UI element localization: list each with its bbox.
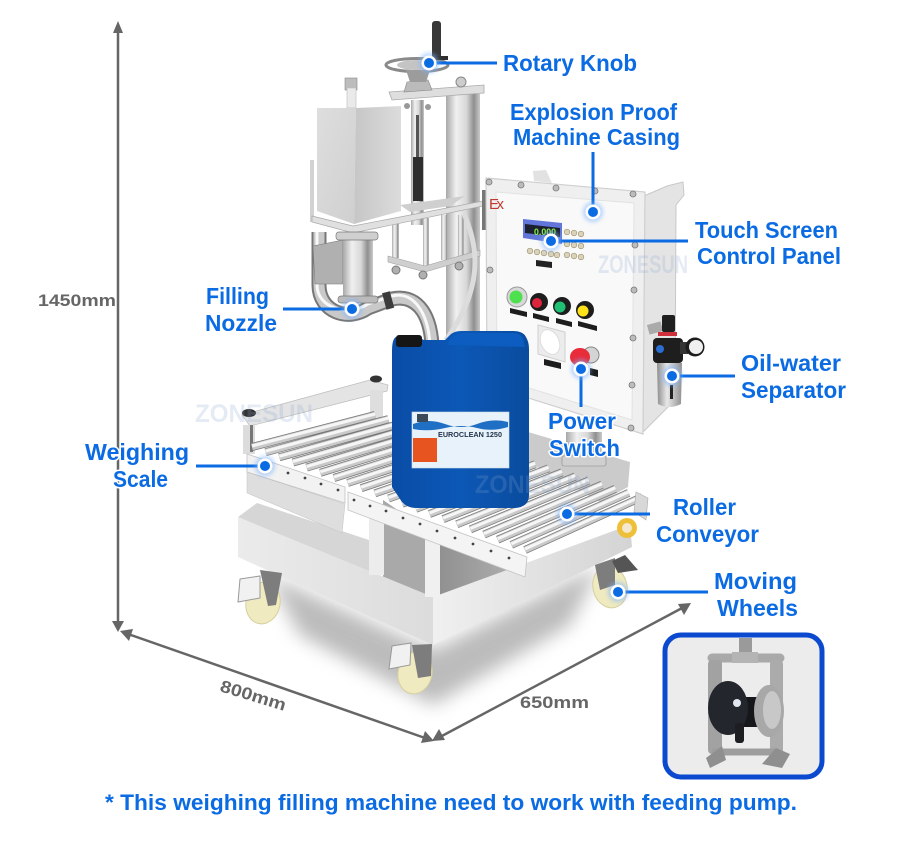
- callout: roller conveyor: Roller: [673, 494, 736, 520]
- caster: front left: [238, 570, 284, 627]
- power switch: [570, 347, 599, 377]
- callout: weighing scale: [85, 439, 275, 492]
- top surface behind rollers: [528, 432, 630, 502]
- rear conveyor rail end: [634, 492, 648, 520]
- callout: filling nozzle: Nozzle: [205, 310, 277, 336]
- dimension: height 1450mm: [38, 21, 124, 632]
- callout: moving wheels: [608, 568, 798, 621]
- casing bolts: [486, 179, 638, 431]
- threaded lead screw: [411, 100, 424, 225]
- support arm: [310, 160, 487, 233]
- watermarks: ZONESUN: [195, 400, 313, 428]
- stem below box: [562, 432, 606, 466]
- Ex mark: Ex: [489, 196, 504, 213]
- callout: explosion proof machine casing: Explosion Proof: [510, 99, 677, 125]
- oil-water separator: [647, 315, 704, 407]
- guide rods: [392, 215, 464, 268]
- caster: right: [588, 555, 638, 611]
- callout: touch screen control panel: Touch Screen: [695, 217, 838, 243]
- touch screen: [523, 219, 562, 244]
- callout: moving wheels: Moving: [714, 568, 797, 594]
- callout: explosion proof machine casing: Machine Casing: [513, 124, 680, 150]
- callout: power switch: Switch: [549, 435, 620, 461]
- callout: power switch: Power: [548, 408, 616, 434]
- callout: roller conveyor: Conveyor: [656, 521, 759, 547]
- callout: oil-water separator: Separator: [741, 377, 846, 403]
- dimension: width 650mm: 650mm: [520, 693, 589, 712]
- dimension: length 800mm: 800mm: [218, 677, 288, 715]
- feeding pump inset: [665, 635, 822, 777]
- yellow foot ring: [617, 518, 637, 538]
- panel buttons: [527, 229, 584, 260]
- icon: diaphragm pump: [706, 638, 790, 768]
- rotary knob handle and wheel: [386, 21, 448, 82]
- callout: weighing scale: Weighing: [85, 439, 189, 465]
- flexible hose: [446, 214, 475, 340]
- front side rails: [247, 454, 527, 577]
- callout: explosion proof machine casing: [510, 99, 680, 222]
- watermarks: [195, 251, 688, 499]
- footnote: * This weighing filling machine need to work with feeding pump.: [105, 790, 797, 815]
- central column: [446, 94, 480, 344]
- product label: EUROCLEAN 1250: [438, 430, 502, 439]
- weighing scale left plate: [247, 472, 345, 533]
- callout: power switch: [548, 359, 620, 461]
- floor shadow: [268, 565, 600, 705]
- machine: [238, 21, 704, 705]
- callout: rotary knob: [419, 50, 637, 76]
- back guard rail: [242, 376, 388, 454]
- caster: front centre: [389, 643, 436, 697]
- callout: touch screen control panel: [541, 217, 841, 269]
- explosion proof control box: [486, 170, 645, 434]
- lower plate with bolts: [388, 250, 480, 279]
- base stand: [238, 432, 632, 645]
- rear panel flange: [643, 182, 684, 432]
- product label: [412, 412, 509, 468]
- callout: filling nozzle: Filling: [206, 283, 269, 309]
- callout: oil-water separator: Oil-water: [741, 350, 841, 376]
- callout: moving wheels: Wheels: [717, 595, 798, 621]
- callout: roller conveyor: [557, 494, 759, 547]
- callout: filling nozzle: [205, 283, 362, 336]
- callout: touch screen control panel: Control Panel: [697, 243, 841, 269]
- watermarks: ZONESUN: [475, 471, 590, 499]
- conveyor legs: [369, 505, 384, 575]
- callout: oil-water separator: [662, 350, 846, 403]
- callout: rotary knob: Rotary Knob: [503, 50, 637, 76]
- dimension: width 650mm: [432, 603, 691, 741]
- top plate: [389, 77, 484, 110]
- selector switch: [536, 325, 565, 369]
- dimension: height 1450mm: 1450mm: [38, 291, 116, 310]
- watermarks: ZONESUN: [598, 251, 688, 279]
- touch screen: 0.000: [534, 227, 556, 238]
- indicator lights: [507, 287, 597, 331]
- callout: weighing scale: Scale: [113, 466, 168, 492]
- rollers: [252, 414, 642, 550]
- dimension: length 800mm: [120, 629, 434, 743]
- tank box: [317, 78, 401, 224]
- blue chemical jerry can: [392, 331, 529, 508]
- filling nozzle pipework: [313, 232, 432, 345]
